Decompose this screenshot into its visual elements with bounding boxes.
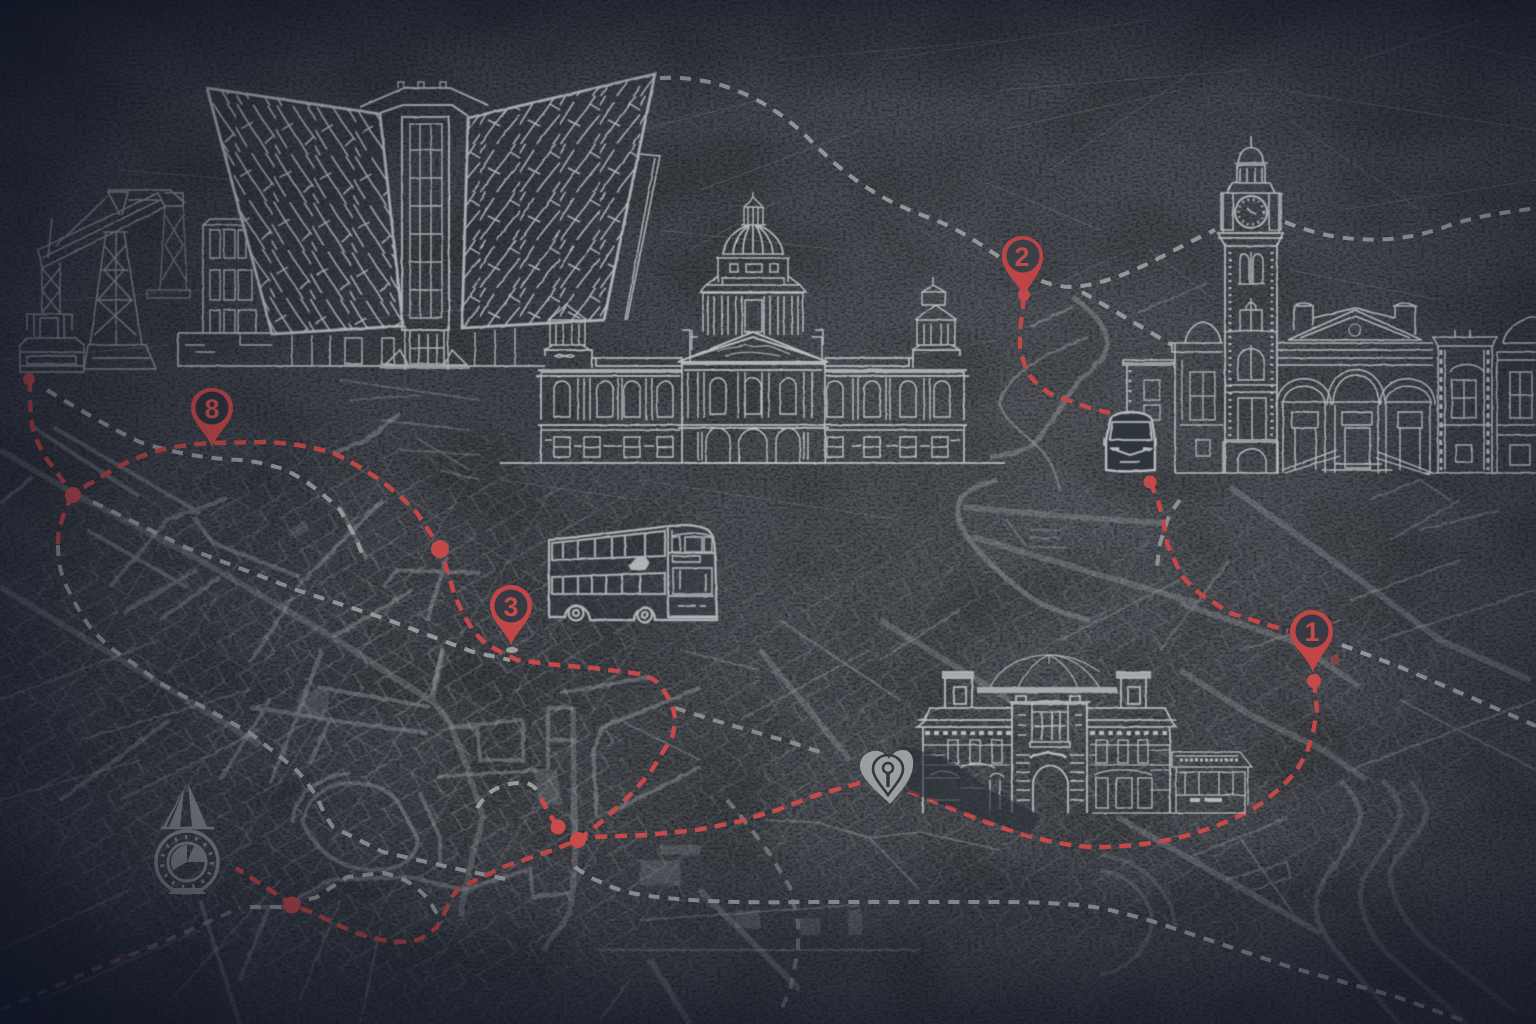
left wing <box>536 350 682 463</box>
red link to centre <box>541 798 558 827</box>
right wing <box>825 350 969 463</box>
crane boom <box>38 190 185 268</box>
drum and columns <box>700 285 806 335</box>
middle lattice tower <box>84 232 156 369</box>
left tower and cab <box>20 262 84 372</box>
red route south <box>578 783 860 840</box>
lantern <box>741 192 766 225</box>
central tower <box>360 82 488 370</box>
annex <box>1172 752 1252 813</box>
red route upper east <box>1020 297 1110 413</box>
red loop start <box>58 495 73 545</box>
east upper route <box>1285 208 1536 240</box>
pin 1 <box>1290 610 1340 672</box>
dome <box>723 225 783 254</box>
left hull facade <box>200 80 410 340</box>
dome arcs <box>990 655 1100 688</box>
pin 2: 2 <box>1014 242 1030 272</box>
shadow fade across market foot <box>900 745 1040 835</box>
cross route <box>727 800 798 1012</box>
west loop <box>58 545 510 880</box>
central portico <box>678 330 829 463</box>
east lower route <box>1342 645 1536 726</box>
clock face <box>1235 196 1267 228</box>
building: shipyard cranes <box>20 190 190 372</box>
annex block <box>203 219 256 333</box>
route markers <box>23 289 1321 963</box>
pin 1: 1 <box>1304 617 1320 647</box>
clock tower <box>1218 136 1283 473</box>
building: Titanic Belfast <box>178 70 660 370</box>
arterial roads <box>0 450 1530 1024</box>
far lattice tower <box>147 206 190 298</box>
building: clock tower station <box>1123 136 1536 475</box>
upper route across the map <box>660 78 1215 287</box>
centre block <box>1009 696 1090 813</box>
building: market hall <box>917 655 1252 813</box>
pin 2 <box>1002 236 1043 297</box>
ground line <box>500 462 1005 464</box>
south-west route <box>250 873 442 922</box>
right hull facade <box>455 70 660 332</box>
icon: heart location marker <box>860 750 913 804</box>
red route west <box>30 380 675 942</box>
left wings <box>1123 322 1223 473</box>
icon: minibus <box>1104 412 1156 472</box>
west and centre streets <box>0 413 700 1024</box>
north-west route <box>47 390 363 557</box>
street grid texture <box>1 422 1478 984</box>
pin 3 <box>490 585 532 653</box>
left wing <box>917 708 1012 813</box>
right wings <box>1425 317 1536 473</box>
icon: compass <box>156 783 218 894</box>
roof bar <box>977 687 1117 693</box>
pin 8 <box>191 388 233 447</box>
red route <box>30 297 1317 942</box>
south route <box>575 867 1467 1022</box>
branch under pin two <box>1082 292 1172 345</box>
building: City Hall <box>500 192 1005 463</box>
block patches <box>290 520 862 935</box>
pin 3: 3 <box>503 592 519 622</box>
right turret <box>912 277 960 350</box>
minor streets <box>0 283 1536 1024</box>
street map layer <box>0 283 1536 1024</box>
far south-west route <box>0 908 240 1010</box>
secondary street grid <box>50 441 1438 966</box>
pediment and central hall <box>1277 303 1435 475</box>
diagonal route <box>93 502 510 660</box>
chimneys <box>943 672 1150 708</box>
icon: double decker bus <box>549 525 717 622</box>
upper drum <box>706 254 800 285</box>
red route far east <box>905 681 1317 847</box>
pin 8: 8 <box>204 394 220 424</box>
riverside link <box>675 708 823 753</box>
podium <box>178 320 604 366</box>
left turret <box>545 305 590 350</box>
inner ring <box>477 783 540 808</box>
right wing <box>1087 708 1176 813</box>
river bends <box>958 297 1517 1024</box>
chalk scratches <box>0 20 1536 520</box>
east stub <box>1157 500 1180 567</box>
red route east <box>1150 482 1288 631</box>
